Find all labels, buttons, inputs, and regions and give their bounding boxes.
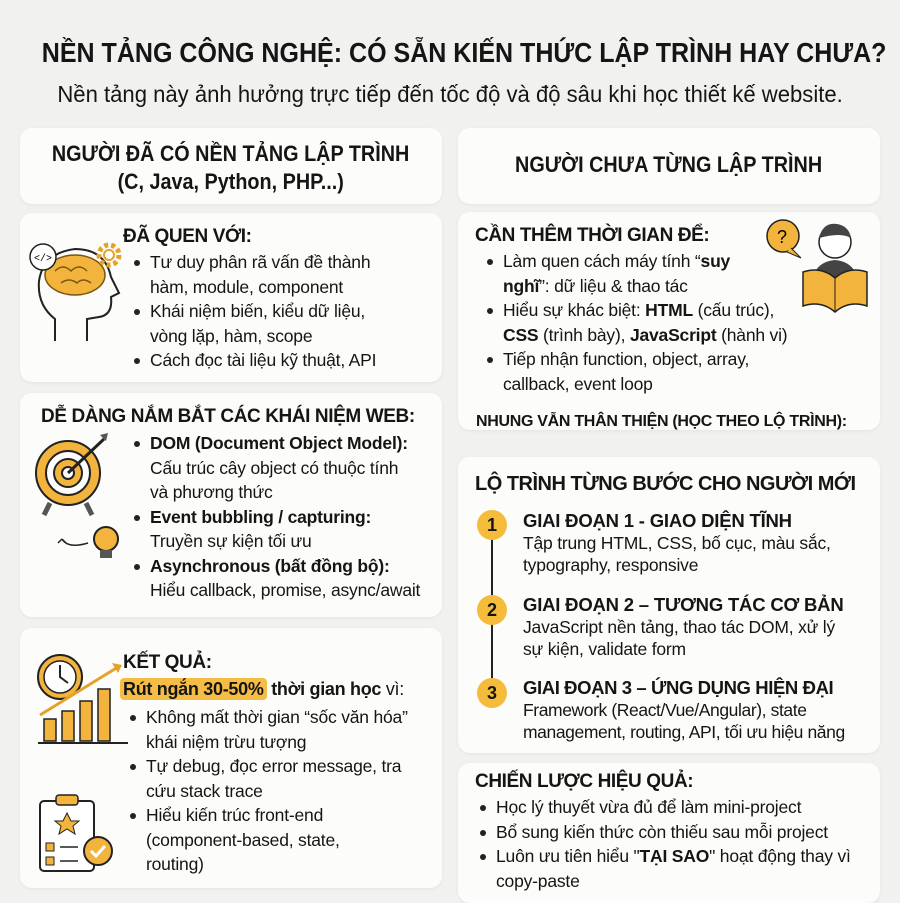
bullets: vòng lặp, hàm, scope	[150, 326, 312, 346]
panel: web concepts	[20, 393, 442, 617]
icon: clock chart	[37, 654, 128, 744]
step 1	[477, 510, 831, 575]
step 3	[477, 677, 845, 742]
subtitle: Nền tảng này ảnh hưởng trực tiếp đến tốc độ và độ sâu khi học thiết kế website.	[57, 81, 843, 107]
bullets	[134, 433, 420, 600]
title: NỀN TẢNG CÔNG NGHỆ: CÓ SẴN KIẾN THỨC LẬP TRÌNH HAY CHƯA?	[42, 37, 886, 68]
bullets: Hiểu sự khác biệt: HTML (cấu trúc),	[503, 300, 774, 320]
icon: brain head	[29, 242, 122, 341]
icon: target and bulb	[35, 433, 119, 558]
panel: left header: NGƯỜI ĐÃ CÓ NỀN TẢNG LẬP TRÌNH	[52, 141, 410, 166]
heading: DỄ DÀNG NẮM BẮT CÁC KHÁI NIỆM WEB:	[41, 406, 415, 427]
highlight line: Rút ngắn 30-50% thời gian học vì:	[123, 679, 404, 699]
bullets: cứu stack trace	[146, 780, 263, 800]
step 2: 2	[487, 600, 497, 620]
bullets: Hiểu callback, promise, async/await	[150, 580, 420, 600]
step 1: Tập trung HTML, CSS, bố cục, màu sắc,	[523, 533, 831, 553]
panel: right header: NGƯỜI CHƯA TỪNG LẬP TRÌNH	[515, 152, 823, 177]
panel: left header	[20, 128, 442, 204]
step 1: typography, responsive	[523, 555, 698, 575]
subheading: NHUNG VẪN THÂN THIỆN (HỌC THEO LỘ TRÌNH):	[476, 413, 847, 430]
step 3: management, routing, API, tối ưu hiệu năng	[523, 722, 845, 742]
bullets: Học lý thuyết vừa đủ để làm mini-project	[496, 797, 801, 817]
heading: ĐÃ QUEN VỚI:	[123, 226, 252, 247]
step 2	[477, 594, 843, 659]
timeline line	[491, 528, 493, 693]
panel: need more time	[458, 212, 880, 430]
heading: LỘ TRÌNH TỪNG BƯỚC CHO NGƯỜI MỚI	[475, 473, 856, 495]
bullets: callback, event loop	[503, 374, 653, 394]
bullets: hàm, module, component	[150, 276, 343, 296]
bullets	[480, 797, 851, 890]
icon: clipboard	[39, 794, 113, 872]
icon: reader	[766, 219, 868, 313]
heading: CẦN THÊM THỜI GIAN ĐỂ:	[475, 225, 709, 246]
bullets: Làm quen cách máy tính “suy	[503, 251, 730, 271]
bullets: copy-paste	[496, 870, 580, 890]
bullets: DOM (Document Object Model):	[150, 433, 408, 453]
bullets	[130, 707, 408, 874]
icon: brain head: </>	[34, 253, 52, 265]
panel: results	[20, 628, 442, 888]
bullets: Tự debug, đọc error message, tra	[146, 756, 401, 776]
bullets: Hiểu kiến trúc front-end	[146, 805, 323, 825]
bullets: Cấu trúc cây object có thuộc tính	[150, 458, 398, 478]
bullets: và phương thức	[150, 482, 273, 502]
bullets: Tiếp nhận function, object, array,	[503, 349, 749, 369]
step 3: Framework (React/Vue/Angular), state	[523, 700, 807, 720]
step 1: GIAI ĐOẠN 1 - GIAO DIỆN TĨNH	[523, 510, 792, 531]
step 2: sự kiện, validate form	[523, 639, 686, 659]
step 3: GIAI ĐOẠN 3 – ỨNG DỤNG HIỆN ĐẠI	[523, 677, 833, 698]
panel: left header: (C, Java, Python, PHP...)	[118, 169, 344, 194]
step 2: GIAI ĐOẠN 2 – TƯƠNG TÁC CƠ BẢN	[523, 594, 843, 615]
bullets: routing)	[146, 854, 204, 874]
panel: right header	[458, 128, 880, 204]
panel: strategy	[458, 763, 880, 903]
bullets: Tư duy phân rã vấn đề thành	[150, 252, 370, 272]
bullets: Asynchronous (bất đồng bộ):	[150, 556, 390, 576]
bullets	[487, 251, 787, 394]
bullets: nghĩ”: dữ liệu & thao tác	[503, 276, 688, 296]
panel: familiar with	[20, 213, 442, 382]
bullets: Event bubbling / capturing:	[150, 506, 371, 526]
bullets	[134, 252, 376, 370]
bullets: Luôn ưu tiên hiểu "TẠI SAO" hoạt động thay vì	[496, 846, 851, 866]
bullets: Cách đọc tài liệu kỹ thuật, API	[150, 350, 376, 370]
bullets: Không mất thời gian “sốc văn hóa”	[146, 707, 408, 727]
panel: roadmap	[458, 457, 880, 753]
heading: KẾT QUẢ:	[123, 652, 212, 673]
bullets: CSS (trình bày), JavaScript (hành vi)	[503, 324, 787, 344]
step 1: 1	[487, 515, 497, 535]
bullets: khái niệm trừu tượng	[146, 732, 306, 752]
bullets: (component-based, state,	[146, 830, 340, 850]
step 2: JavaScript nền tảng, thao tác DOM, xử lý	[523, 617, 835, 637]
step 3: 3	[487, 683, 497, 703]
bullets: Bổ sung kiến thức còn thiếu sau mỗi project	[496, 822, 828, 842]
bullets: Khái niệm biến, kiểu dữ liệu,	[150, 301, 365, 321]
icon: reader: ?	[777, 227, 787, 247]
heading: CHIẾN LƯỢC HIỆU QUẢ:	[475, 771, 693, 792]
bullets: Truyền sự kiện tối ưu	[150, 531, 312, 551]
